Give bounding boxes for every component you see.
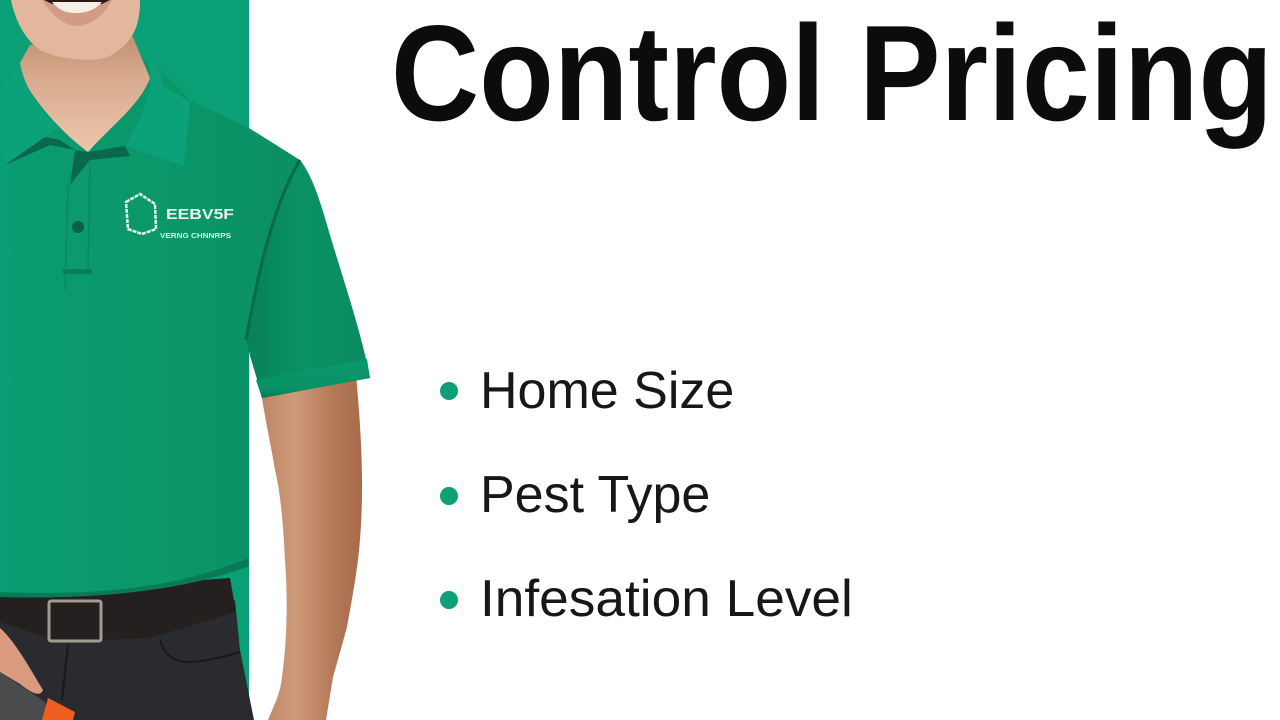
shirt body [0,60,300,597]
collar shadow [5,137,130,185]
collar right [125,60,190,166]
belt [0,578,236,642]
bullet: home size: Home Size [480,362,734,420]
trousers [0,600,254,720]
bullet list [440,362,853,628]
lower lip [42,0,112,26]
bullet: infestation level: Infesation Level [480,570,853,628]
collar left [0,62,58,165]
arm [260,375,362,720]
belt buckle [49,601,101,641]
button [72,221,84,233]
sprayer orange nozzle [42,698,75,720]
green background panel [0,0,249,720]
sleeve seam [246,160,300,340]
mouth shadow [44,0,110,4]
logo tagline: VERNG CHNNRPS [160,231,231,240]
shirt hem shadow [0,558,249,597]
face and chin [11,0,140,60]
logo wordmark: EEBV5F [166,207,234,223]
neck [17,35,150,152]
trouser pocket and seam [62,640,240,700]
sleeve [246,160,370,398]
photo: technician in green polo [0,0,370,720]
title: Control Pricing [391,0,1273,149]
sprayer handle [0,672,48,720]
bullet: pest type: Pest Type [480,466,710,524]
placket end [63,269,92,274]
logo house icon [126,194,156,234]
shirt logo [126,194,234,240]
placket [65,160,90,290]
sleeve hem [256,359,370,398]
teeth [52,2,102,13]
hand [0,628,43,694]
